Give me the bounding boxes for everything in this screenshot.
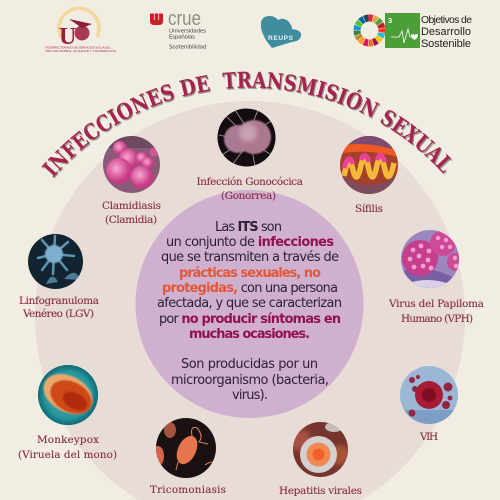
logo: Objetivos de Desarrollo Sostenible: Objetivos de	[421, 15, 472, 26]
label: hepatitis: Hepatitis virales	[279, 485, 362, 497]
logo: crue: Españolas	[169, 34, 195, 40]
logo: REUPS	[261, 16, 301, 48]
label: gonorrhea: Infección Gonocócica	[196, 176, 303, 188]
logo: Objetivos de Desarrollo Sostenible: Sostenible	[421, 38, 471, 50]
icon: trichomonas	[156, 418, 216, 478]
central text block: prácticas sexuales, no	[179, 266, 321, 281]
label: HPV: Virus del Papiloma	[388, 298, 484, 310]
central text block: protegidas, con una persona	[162, 281, 338, 296]
central text block: muchas ocasiones.	[189, 327, 310, 342]
label: LGV: Venéreo (LGV)	[22, 308, 94, 320]
logo: crue: Sostenibilidad	[169, 44, 207, 50]
central text block: afectada, y que se caracterizan	[157, 296, 342, 311]
label: monkeypox: (Viruela del mono)	[18, 449, 117, 461]
central text block: virus).	[232, 388, 268, 403]
label: HPV: Humano (VPH)	[401, 313, 473, 325]
logo: Universidad de Sevilla: U	[59, 24, 76, 50]
label: gonorrhea	[196, 176, 303, 202]
label: gonorrhea: (Gonorrea)	[221, 190, 276, 202]
icon: SDG 3 square	[385, 13, 420, 48]
central text block: un conjunto de infecciones	[166, 235, 334, 250]
icon: gonorrhea	[218, 108, 276, 166]
icon: HIV	[400, 366, 458, 424]
logo: crue: Universidades	[169, 28, 206, 34]
logo: crue	[150, 8, 207, 50]
inner circle panel	[136, 190, 364, 418]
label: chlamydia: (Clamidia)	[105, 214, 157, 226]
icon: SDG wheel	[356, 17, 383, 44]
logo: crue: crue	[168, 8, 201, 30]
icon: hepatitis	[293, 422, 348, 477]
central text block	[157, 220, 342, 403]
icon: syphilis	[340, 136, 398, 194]
logo: REUPS: REUPS	[268, 35, 294, 42]
icon: monkeypox	[38, 365, 98, 425]
logo: Universidad de Sevilla: VICERRECTORADO DE SERVICIOS SOCIALES,	[45, 46, 111, 50]
central text block: Son producidas por un	[181, 357, 318, 372]
icon: LGV	[28, 234, 83, 289]
central text block: microorganismo (bacteria,	[171, 373, 329, 388]
label: chlamydia: Clamidiasis	[102, 200, 161, 212]
label: LGV: Linfogranuloma	[19, 295, 99, 307]
label: monkeypox	[18, 434, 117, 461]
icon: chlamydia	[103, 136, 160, 193]
label: LGV	[19, 295, 99, 320]
label: monkeypox: Monkeypox	[37, 434, 99, 446]
central text block: que se transmiten a través de	[161, 250, 339, 265]
logo: Objetivos de Desarrollo Sostenible: Desarrollo	[421, 26, 471, 38]
outer circle panel	[35, 101, 465, 500]
label: HIV: VIH	[419, 431, 438, 443]
icon: HPV	[401, 230, 459, 288]
central text block: por no producir síntomas en	[159, 312, 341, 327]
label: HPV	[388, 298, 484, 325]
logo: Universidad de Sevilla	[45, 8, 116, 53]
logo: Universidad de Sevilla: VIDA SALUDABLE, IGUALDAD Y COOPERACIÓN	[45, 48, 116, 53]
label: syphilis: Sífilis	[355, 203, 383, 215]
logo: Objetivos de Desarrollo Sostenible	[356, 13, 472, 50]
logo: Objetivos de Desarrollo Sostenible: 3	[388, 16, 392, 25]
label: chlamydia	[102, 200, 161, 226]
title: INFECCIONES DE TRANSMISIÓN SEXUAL	[42, 72, 452, 179]
central text block: Las ITS son	[215, 220, 282, 235]
label: trichomoniasis: Tricomoniasis	[150, 484, 226, 496]
